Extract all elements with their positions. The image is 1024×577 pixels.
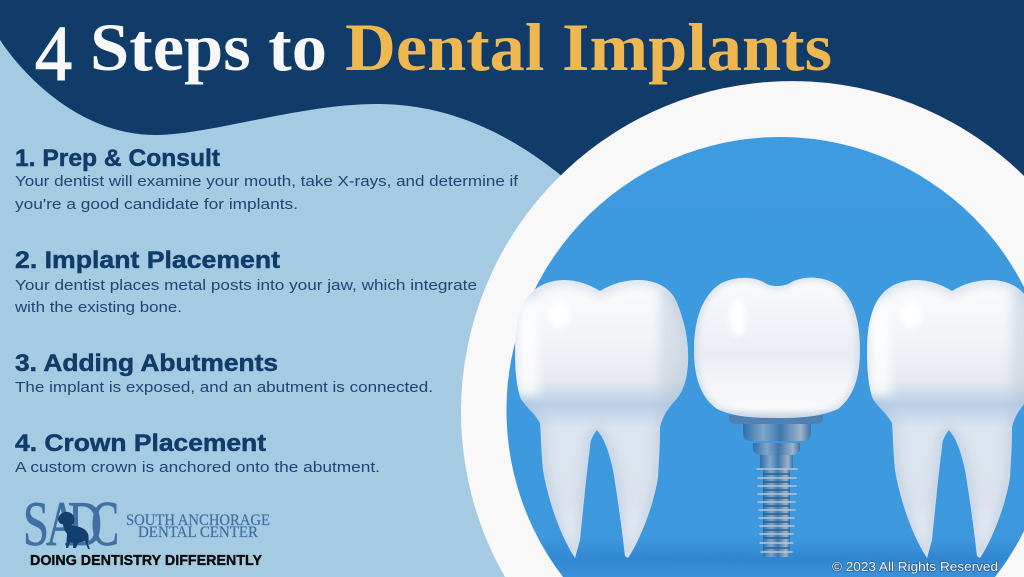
step 2	[14, 247, 477, 316]
logo icon: ram	[58, 512, 90, 549]
step 3	[15, 350, 433, 396]
implant screw threads	[757, 466, 797, 557]
step 2: with the existing bone.	[14, 299, 182, 316]
white ring	[461, 81, 1024, 577]
logo wordmark	[126, 512, 270, 541]
logo wordmark: SOUTH ANCHORAGE	[126, 512, 270, 529]
step 4	[15, 430, 380, 476]
logo wordmark: DENTAL CENTER	[138, 524, 259, 541]
floor shadow	[600, 555, 1000, 561]
logo monogram SADC: A	[46, 489, 78, 559]
step 1: you're a good candidate for implants.	[15, 196, 298, 213]
tagline: DOING DENTISTRY DIFFERENTLY	[30, 553, 262, 569]
icon: dental implant	[694, 278, 860, 557]
step 1: Your dentist will examine your mouth, take X-rays, and determine if	[15, 173, 519, 190]
step 1	[15, 145, 519, 213]
copyright: © 2023 All Rights Reserved	[832, 560, 998, 574]
logo monogram SADC: S	[23, 489, 49, 559]
logo monogram SADC	[23, 489, 119, 559]
logo monogram SADC: D	[68, 489, 102, 559]
step 2: Your dentist places metal posts into your jaw, which integrate	[15, 277, 477, 294]
step 3: The implant is exposed, and an abutment is connected.	[15, 379, 433, 396]
photo: blue circle	[506, 137, 1024, 577]
logo: South Anchorage Dental Center	[23, 489, 270, 569]
header: navy wave	[0, 0, 1024, 400]
icon: right tooth	[867, 280, 1024, 558]
title: Dental Implants	[345, 9, 832, 85]
title	[35, 9, 832, 97]
implant neck	[760, 454, 793, 468]
title: Steps to	[90, 9, 327, 85]
logo monogram SADC: C	[91, 489, 119, 559]
abutment collar	[729, 415, 823, 424]
abutment upper	[743, 423, 811, 441]
step 1: 1. Prep & Consult	[15, 145, 220, 172]
crown	[694, 278, 860, 418]
step 4: A custom crown is anchored onto the abutment.	[15, 459, 380, 476]
step 4: 4. Crown Placement	[15, 430, 266, 457]
step 3: 3. Adding Abutments	[15, 350, 278, 377]
step 2: 2. Implant Placement	[15, 247, 280, 274]
icon: left tooth	[515, 280, 692, 558]
abutment lower	[753, 443, 800, 455]
title: 4	[35, 10, 72, 97]
